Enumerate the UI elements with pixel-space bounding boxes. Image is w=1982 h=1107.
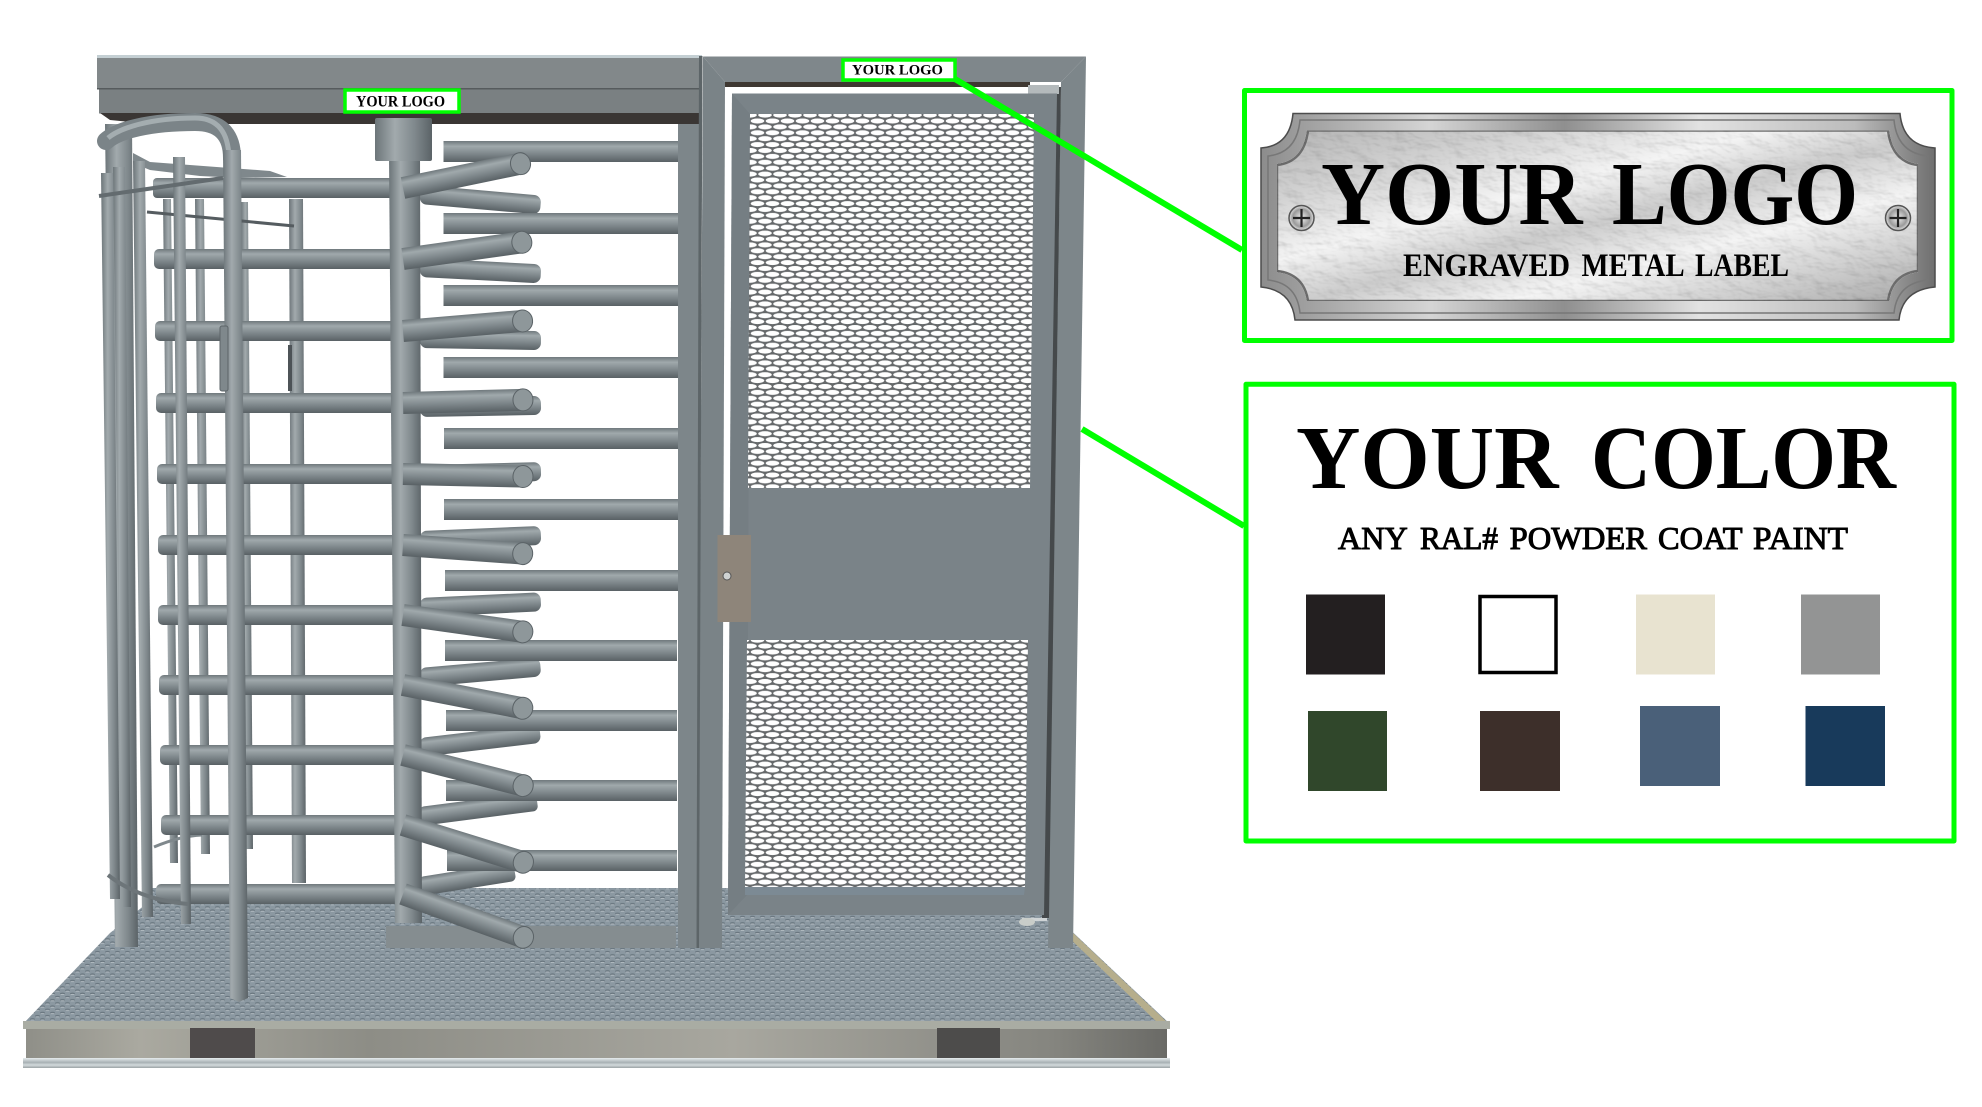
base block [386,926,676,948]
panel: your color [1246,384,1954,841]
fixed comb bars [444,141,678,871]
frame right post [1048,56,1086,948]
curved cage front bars and rail [99,118,248,1002]
logo tag on turnstile beam: YOUR LOGO [356,94,445,110]
heading: your logo: LOGO [1612,145,1858,244]
hub [375,118,432,161]
floor plate surface [23,888,1170,1024]
subheading: any RAL powder coat paint: COAT [1658,520,1743,556]
frame left post [698,56,725,948]
logo tag on turnstile beam [345,90,459,112]
left rotor arms [153,178,406,904]
front rotor arms [399,151,537,951]
icon: right screw [1886,206,1910,230]
swatches: colour chips [1306,594,1885,791]
logo tag on door frame [843,60,955,80]
hinge top [1028,85,1059,94]
metal plate [1261,114,1935,320]
subheading: any RAL powder coat paint: ANY [1338,520,1408,556]
rear rotor arms [418,185,541,896]
subheading: any RAL powder coat paint: POWDER [1510,520,1648,556]
central rotor post [375,118,432,923]
top beam [97,55,702,124]
subheading: any RAL powder coat paint: RAL# [1420,520,1498,556]
door bottom hinge [1019,918,1047,926]
upper mesh panel [748,114,1034,488]
heading: your color: COLOR [1591,409,1897,508]
subheading: engraved metal label: LABEL [1695,248,1789,284]
lock plate [718,535,751,622]
subheading: any RAL powder coat paint: PAINT [1753,520,1848,556]
subheading: engraved metal label: ENGRAVED [1403,248,1570,284]
heading: your color: YOUR [1296,409,1559,508]
panel: engraved metal label [1244,90,1952,340]
door leaf [718,94,1057,915]
logo tag on door frame: YOUR LOGO [852,62,943,78]
icon: left screw [1289,206,1314,230]
subheading: engraved metal label: METAL [1582,248,1684,284]
door frame [696,56,1086,948]
green leader line to logo panel [955,79,1242,250]
platform front face [23,1021,1170,1068]
turnstile side post [678,124,699,948]
turnstile rear cage bars [133,153,306,883]
heading: your logo: YOUR [1321,145,1583,244]
floor platform [23,888,1170,1068]
lower mesh panel [745,640,1028,887]
frame lintel [703,56,1086,82]
green leader line to colour panel [1082,429,1244,526]
